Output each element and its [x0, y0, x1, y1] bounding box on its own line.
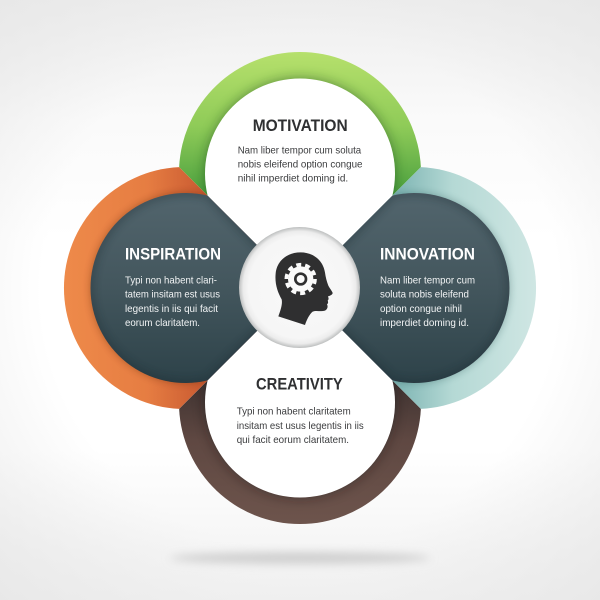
body: inspiration: eorum claritatem.	[125, 317, 200, 329]
center circle	[239, 227, 360, 348]
body: innovation	[380, 274, 475, 329]
body: inspiration: legentis in iis qui facit	[125, 303, 218, 315]
body: creativity: Typi non habent claritatem	[237, 406, 351, 418]
ground shadow	[170, 552, 430, 564]
body: innovation: option congue nihil	[380, 303, 462, 315]
panel: inspiration dark petal	[90, 193, 258, 383]
text block: innovation	[380, 246, 475, 329]
body: innovation: imperdiet doming id.	[380, 317, 469, 329]
heading: innovation: INNOVATION	[380, 246, 475, 264]
text block: motivation	[238, 117, 363, 185]
panel: creativity white petal	[205, 288, 395, 497]
body: motivation	[238, 144, 363, 185]
body: inspiration	[125, 274, 220, 329]
panel: innovation dark petal	[342, 193, 510, 383]
ring: motivation green	[179, 52, 421, 245]
ring: innovation teal	[392, 167, 536, 409]
ring: creativity brown	[179, 330, 421, 524]
body: innovation: soluta nobis eleifend	[380, 289, 469, 301]
panel: motivation white petal	[205, 79, 395, 288]
text block: creativity	[237, 375, 364, 446]
body: creativity: qui facit eorum claritatem.	[237, 434, 349, 446]
heading: creativity: CREATIVITY	[256, 375, 343, 393]
body: creativity: insitam est usus legentis in iis	[237, 420, 364, 432]
body: innovation: Nam liber tempor cum	[380, 274, 475, 286]
body: motivation: nihil imperdiet doming id.	[238, 173, 348, 185]
ring: inspiration orange	[64, 167, 257, 409]
body: motivation: Nam liber tempor cum soluta	[238, 144, 361, 156]
text block: inspiration	[125, 246, 221, 329]
body: creativity	[237, 406, 364, 446]
body: inspiration: Typi non habent clari-	[125, 274, 217, 286]
body: inspiration: tatem insitam est usus	[125, 289, 220, 301]
heading: motivation: MOTIVATION	[253, 117, 348, 135]
heading: inspiration: INSPIRATION	[125, 246, 221, 264]
body: motivation: nobis eleifend option congue	[238, 158, 363, 170]
icon: head with gear	[275, 252, 333, 325]
